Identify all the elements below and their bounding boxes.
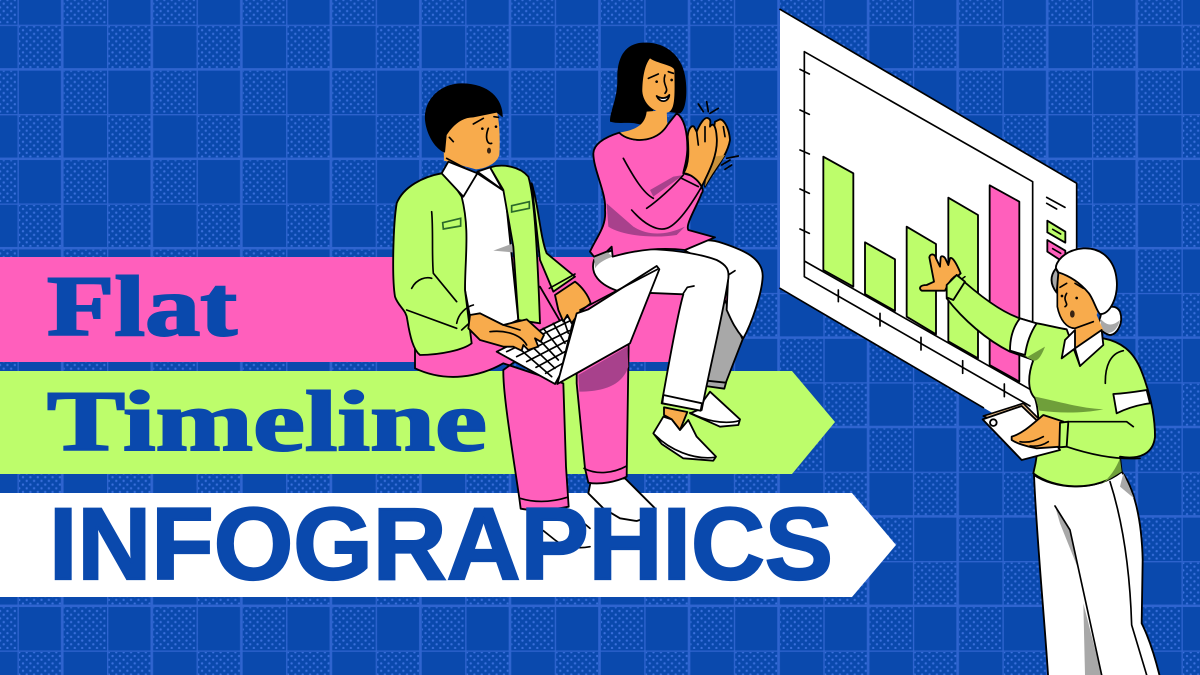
bar 3 (907, 227, 936, 334)
holding hand (1012, 415, 1063, 448)
hair (610, 43, 686, 127)
heading word: INFOGRAPHICS: INFOGRAPHICS (49, 487, 833, 601)
near leg (593, 249, 735, 411)
face details (447, 117, 498, 174)
neck and face (619, 110, 667, 140)
pink top (590, 113, 715, 257)
hair bun (1098, 307, 1121, 335)
chart axes (804, 52, 1033, 406)
sweater (947, 275, 1155, 486)
clap lines (698, 102, 738, 169)
bar 5 pink (990, 185, 1019, 382)
trousers (1034, 472, 1161, 675)
heading word: Timeline: Timeline (47, 373, 487, 469)
wall chart board (780, 9, 1077, 462)
laptop keyboard (497, 313, 575, 384)
bar 4 (948, 198, 978, 358)
tablet (983, 403, 1045, 433)
pockets (443, 202, 529, 229)
lap and trousers (415, 287, 655, 548)
raised sleeve cuff (947, 275, 965, 300)
near shoe (653, 407, 716, 461)
far leg (685, 240, 763, 384)
clapping hands (683, 118, 730, 187)
screen lid (557, 266, 659, 384)
hair (425, 83, 503, 153)
right hand (555, 282, 591, 323)
far shoe (690, 381, 740, 427)
jacket left front and sleeve (393, 172, 472, 355)
man with laptop (393, 83, 659, 548)
woman presenting (920, 248, 1161, 675)
banner: green arrow (0, 371, 835, 474)
neck and face (443, 110, 500, 169)
woman clapping (590, 43, 763, 461)
raised hand (920, 254, 961, 291)
sweater stripes (1010, 318, 1037, 355)
upper body (590, 43, 738, 257)
far arm sleeve (532, 183, 575, 292)
collar (1062, 330, 1075, 358)
axis ticks (800, 69, 1004, 397)
neck and face (1057, 273, 1103, 355)
bar 1 (823, 157, 853, 287)
legend (1047, 197, 1065, 263)
banner: white arrow (0, 493, 896, 597)
jacket right front (490, 166, 540, 323)
white shirt (462, 173, 518, 327)
laptop lid and right hand (555, 266, 659, 384)
heading word: Flat: Flat (47, 258, 237, 354)
banner: pink arrow (0, 257, 745, 362)
forearm cuff (1059, 422, 1068, 447)
collar (442, 162, 477, 197)
hair (1052, 268, 1058, 293)
left hand (468, 313, 544, 351)
head and torso (393, 83, 575, 355)
bar 2 (865, 242, 895, 311)
cuff (947, 275, 1068, 447)
board panel (780, 9, 1077, 462)
